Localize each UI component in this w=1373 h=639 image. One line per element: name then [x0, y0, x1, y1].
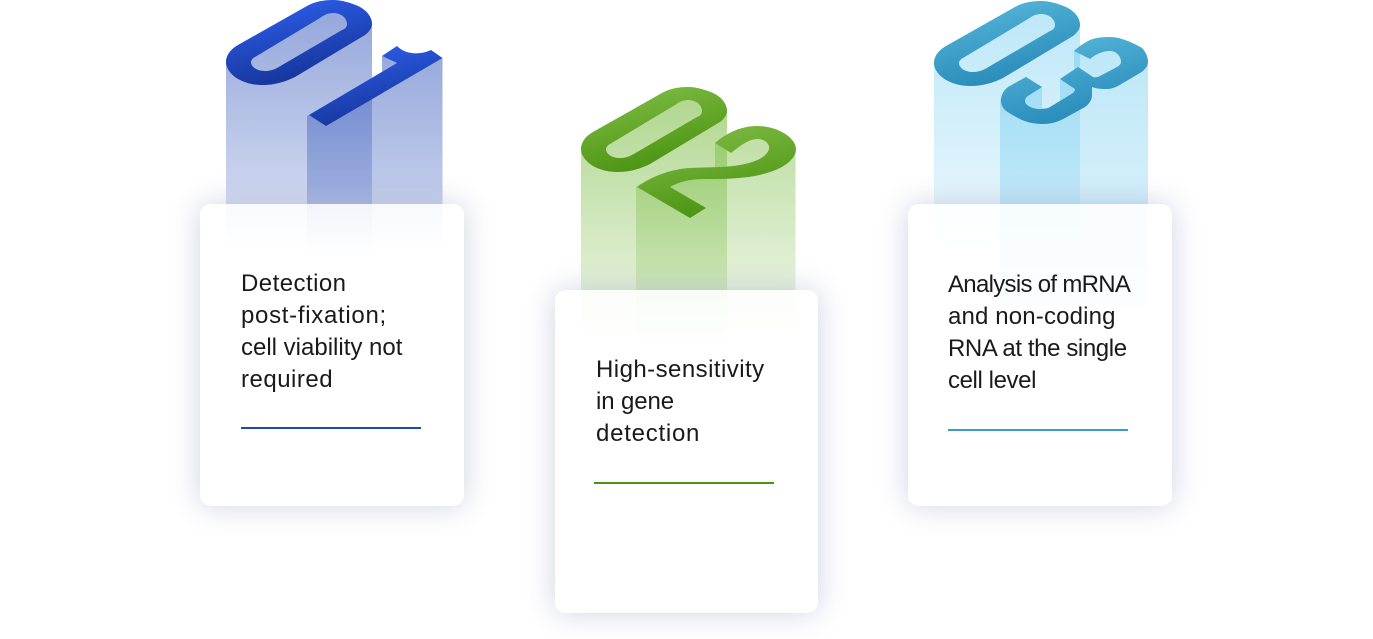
- card 3 text: cell level: [948, 367, 1036, 394]
- card 1 text: cell viability not: [241, 334, 402, 361]
- card 2 text: [596, 356, 765, 447]
- card 2 text: High-sensitivity: [596, 356, 765, 383]
- card 2 text: detection: [596, 420, 700, 447]
- column behind zero: [581, 87, 727, 350]
- column behind two: [636, 139, 796, 350]
- digit 3: [1001, 37, 1148, 124]
- card 3 text: [948, 271, 1131, 394]
- card 3: [908, 204, 1172, 506]
- card 2 text: in gene: [596, 388, 674, 415]
- card 1 text: post-fixation;: [241, 302, 387, 329]
- card 1 text: Detection: [241, 270, 346, 297]
- column behind zero: [934, 1, 1080, 245]
- digit 1: [309, 46, 442, 126]
- card 3 rule: [948, 429, 1128, 431]
- card 1: [200, 204, 464, 506]
- card 1 rule: [241, 427, 421, 429]
- card 3 text: and non-coding: [948, 303, 1116, 330]
- column behind one: [307, 56, 442, 256]
- column behind zero: [226, 0, 372, 256]
- digit 2: [637, 126, 796, 218]
- digit 0: [934, 1, 1080, 86]
- card 3 text: Analysis of mRNA: [948, 271, 1130, 298]
- card 1 text: [241, 270, 402, 393]
- card 1 text: required: [241, 366, 333, 393]
- digit 0: [581, 87, 727, 172]
- card 2 rule: [594, 482, 774, 484]
- column behind three: [1000, 51, 1148, 305]
- card 2: [555, 290, 818, 613]
- card 3 text: RNA at the single: [948, 335, 1127, 362]
- digit 0: [226, 0, 372, 85]
